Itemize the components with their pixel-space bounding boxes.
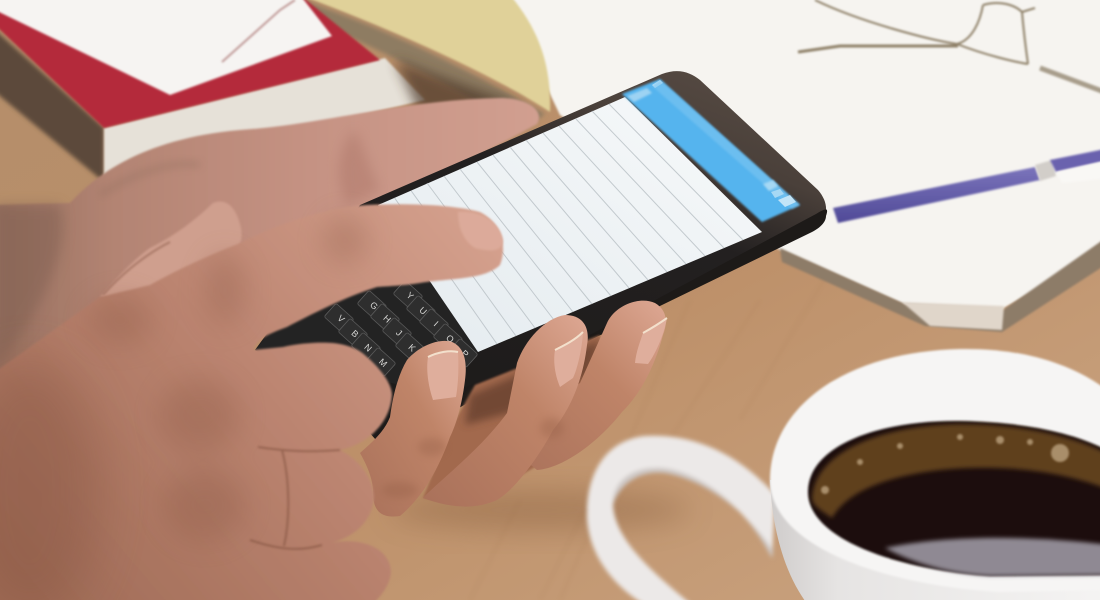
keyboard keys: N (362, 342, 374, 354)
pen (833, 148, 1100, 223)
keyboard keys: G (368, 300, 380, 312)
cup rim (770, 349, 1100, 592)
keyboard keys: Y (404, 290, 416, 301)
palm behind holding fingers (423, 335, 600, 505)
glasses, top right (798, 0, 1100, 94)
crema (812, 424, 1100, 518)
keyboard keys: P (459, 348, 471, 359)
notebook edge, right (780, 235, 1100, 332)
closed red book, top left (0, 0, 425, 182)
cup handle (587, 436, 775, 600)
finger creases (250, 447, 340, 549)
keyboard keys: O (444, 333, 456, 345)
cup body (770, 480, 1100, 600)
coffee cup (587, 349, 1100, 600)
middle finger (423, 315, 588, 507)
front hand typing (0, 201, 503, 600)
keyboard (255, 205, 478, 385)
table shadow under hand (390, 490, 690, 530)
keyboard keys: K (406, 342, 418, 353)
keyboard keys: V (335, 313, 347, 324)
palm, lower fingers and pointing index finger (0, 204, 503, 600)
fingers holding the phone (360, 301, 667, 517)
keyboard keys: B (349, 328, 361, 339)
crease under bent finger (103, 242, 170, 295)
paper background, top right (500, 0, 1100, 310)
knuckle shading (88, 216, 367, 541)
shadow behind the hand (395, 60, 520, 115)
dark side of the hand (0, 360, 100, 600)
open book, top centre (296, 0, 550, 128)
finger nails (427, 318, 667, 400)
keyboard keys: H (381, 313, 393, 325)
bent finger behind index (100, 201, 242, 300)
wood grain (470, 270, 830, 600)
index finger (360, 341, 466, 517)
keyboard keys: J (394, 328, 404, 338)
screen (378, 97, 762, 352)
index fingernail (458, 212, 503, 250)
keyboard keys: M (377, 357, 389, 369)
coffee (808, 421, 1100, 576)
keyboard keys (324, 280, 478, 377)
smartphone (255, 71, 827, 450)
ring finger (500, 301, 666, 470)
phone body (255, 71, 826, 450)
back hand holding the phone (0, 98, 539, 372)
screen ruled lines (394, 104, 743, 344)
blue title bar (622, 79, 800, 222)
finger joint shading (382, 418, 564, 498)
keyboard keys: U (417, 305, 429, 317)
keyboard keys: I (432, 319, 440, 328)
coffee reflection (885, 538, 1100, 576)
